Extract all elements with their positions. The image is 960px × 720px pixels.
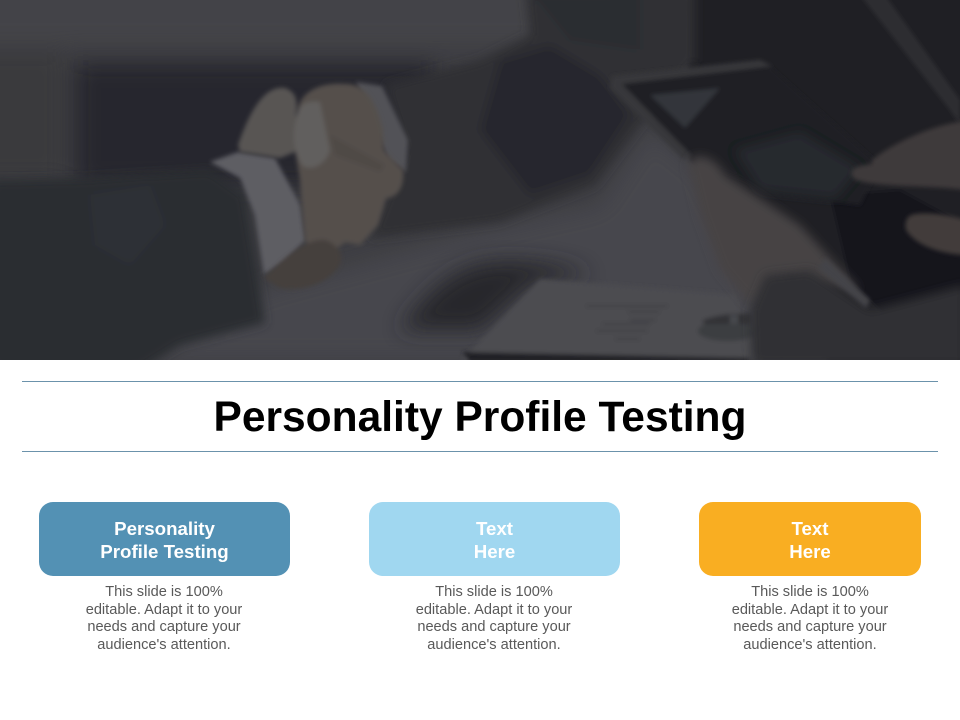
description 1: editable. Adapt it to your (86, 602, 242, 618)
description 1: needs and capture your (87, 619, 241, 635)
sleeve highlight (818, 258, 870, 308)
button 3: Text Here: Here (789, 541, 831, 562)
button 3: Text Here: Text (791, 518, 829, 539)
left shirt cuff (210, 152, 305, 274)
description 3: audience's attention. (743, 637, 877, 653)
description 3: needs and capture your (733, 619, 887, 635)
description 3 (732, 584, 888, 653)
description 3: editable. Adapt it to your (732, 602, 888, 618)
left sleeve (0, 170, 265, 370)
description 3: This slide is 100% (751, 584, 869, 600)
button 1: Personality Profile Testing: Profile Testing (100, 541, 229, 562)
clasped hands (238, 84, 403, 289)
lower right sleeve (750, 270, 960, 365)
table surface (140, 130, 760, 360)
button 2: Text Here: Text (476, 518, 513, 539)
button 1: Personality Profile Testing: Personality (114, 518, 215, 539)
description 2: audience's attention. (427, 637, 561, 653)
button 1: Personality Profile Testing (39, 502, 290, 576)
hand holding tablet (688, 156, 860, 305)
title: Personality Profile Testing (214, 394, 746, 441)
right arm sleeve (370, 0, 695, 238)
button 2: Text Here (369, 502, 620, 576)
dark suit at right (685, 0, 960, 365)
tablet (610, 60, 880, 205)
description 2: needs and capture your (417, 619, 571, 635)
description 2: This slide is 100% (435, 584, 553, 600)
description 2: editable. Adapt it to your (416, 602, 572, 618)
description 1: This slide is 100% (105, 584, 223, 600)
button 2: Text Here: Here (474, 541, 515, 562)
fingers on tablet (851, 121, 960, 255)
dark photo overlay (0, 0, 960, 360)
button 3: Text Here (699, 502, 921, 576)
description 1: audience's attention. (97, 637, 231, 653)
table reflection (400, 261, 590, 330)
description 2 (416, 584, 572, 653)
right shirt cuff (356, 82, 408, 172)
paper document with chart (462, 279, 760, 362)
hero photo: business handshake and tablet (0, 0, 960, 360)
description 1 (86, 584, 242, 653)
